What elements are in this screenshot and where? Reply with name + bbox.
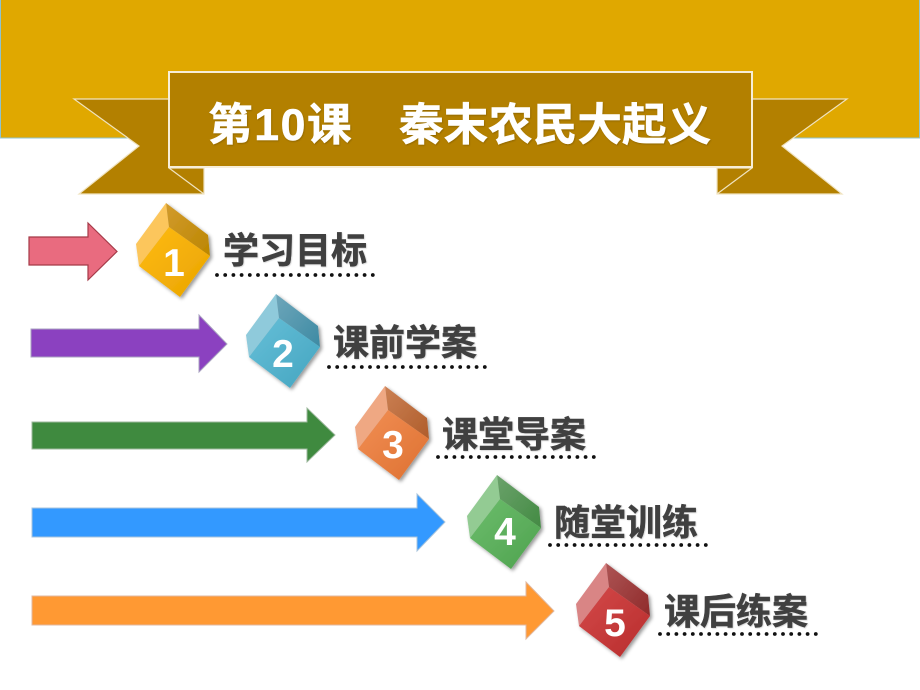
- ribbon right tail: [717, 99, 847, 194]
- title text: 秦末农民大起义: [399, 101, 711, 150]
- heading 1: 学习目标: [223, 230, 367, 271]
- heading 3: 课堂导案: [442, 414, 586, 455]
- dotted line 2: [329, 365, 489, 369]
- dotted line 4: [550, 543, 710, 547]
- arrow 1: [29, 223, 117, 280]
- cube 3: [355, 386, 429, 480]
- heading 2: 课前学案: [333, 322, 477, 363]
- item 1: [29, 203, 378, 297]
- number 3: 3: [382, 424, 404, 467]
- item 2: [31, 294, 489, 388]
- dotted line 5: [660, 632, 820, 636]
- item 4: [32, 475, 710, 569]
- arrow 4: [32, 494, 445, 551]
- dotted line 1: [217, 273, 378, 277]
- number 5: 5: [604, 602, 626, 645]
- heading 5: 课后练案: [664, 591, 808, 632]
- cube 5: [576, 563, 650, 657]
- item 3: [32, 386, 598, 480]
- cube 1: [136, 203, 210, 297]
- dotted line 3: [438, 455, 598, 459]
- ribbon left fold: [169, 168, 204, 194]
- arrow 3: [32, 408, 335, 462]
- header gold band: [0, 0, 920, 138]
- number 1: 1: [163, 242, 185, 285]
- number 2: 2: [272, 333, 294, 376]
- arrow 5: [32, 582, 554, 639]
- heading 4: 随堂训练: [554, 502, 698, 543]
- arrow 2: [31, 315, 227, 372]
- ribbon main panel: [169, 72, 752, 167]
- item 5: [32, 563, 820, 657]
- title ribbon: [74, 72, 847, 194]
- ribbon right fold: [717, 168, 752, 194]
- cube 4: [467, 475, 541, 569]
- ribbon left tail: [74, 99, 204, 194]
- cube 2: [246, 294, 320, 388]
- title text: 第10课: [208, 101, 353, 150]
- number 4: 4: [494, 511, 516, 554]
